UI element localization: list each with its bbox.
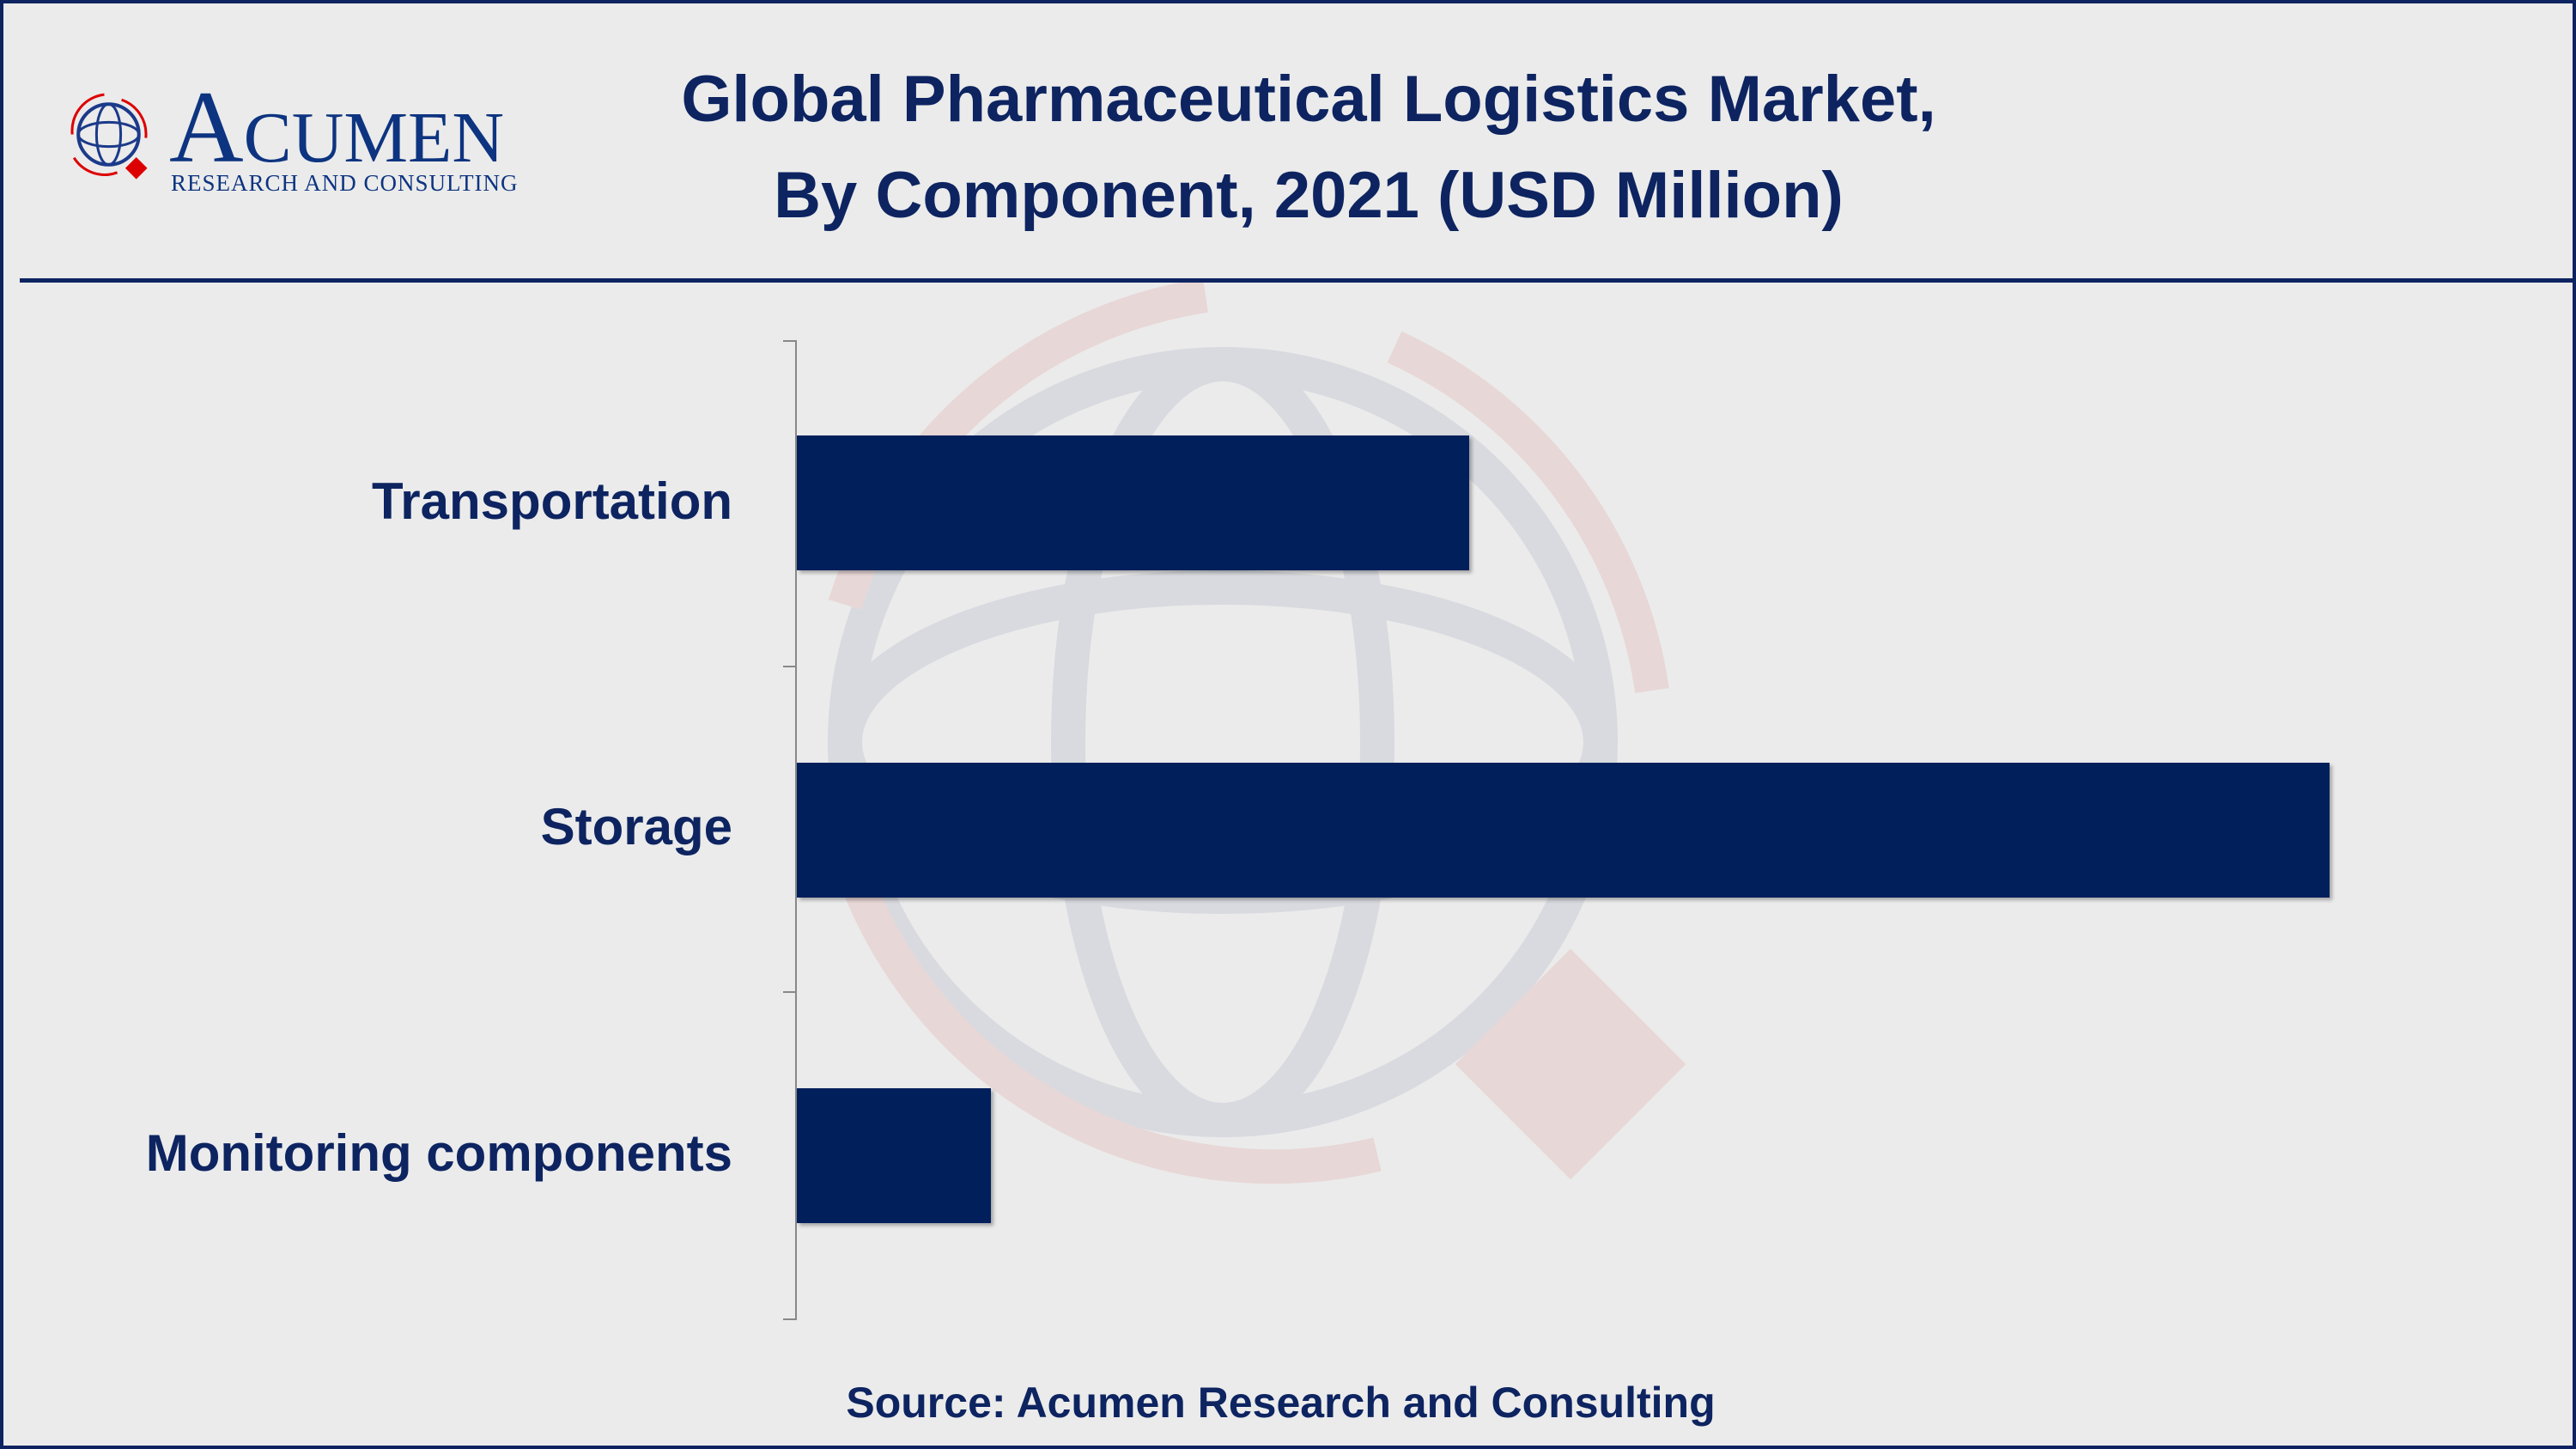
icon: globe [70, 93, 148, 180]
label: Monitoring components: Monitoring components [146, 1124, 732, 1182]
label: Storage: Storage [541, 798, 732, 855]
logo: RESEARCH AND CONSULTING [171, 170, 519, 196]
bar: Transportation [797, 435, 1469, 570]
logo text: ACUMEN [169, 70, 504, 184]
watermark globe [828, 283, 1686, 1184]
title: Global Pharmaceutical Logistics Market, [681, 63, 1936, 136]
title [681, 63, 1936, 232]
bar: Monitoring components [797, 1088, 991, 1223]
chart [783, 340, 797, 1320]
bar: Storage [797, 763, 2330, 898]
source: Source: Acumen Research and Consulting [846, 1379, 1716, 1427]
title: By Component, 2021 (USD Million) [774, 159, 1844, 232]
logo [70, 70, 519, 196]
label: Transportation: Transportation [372, 472, 732, 530]
